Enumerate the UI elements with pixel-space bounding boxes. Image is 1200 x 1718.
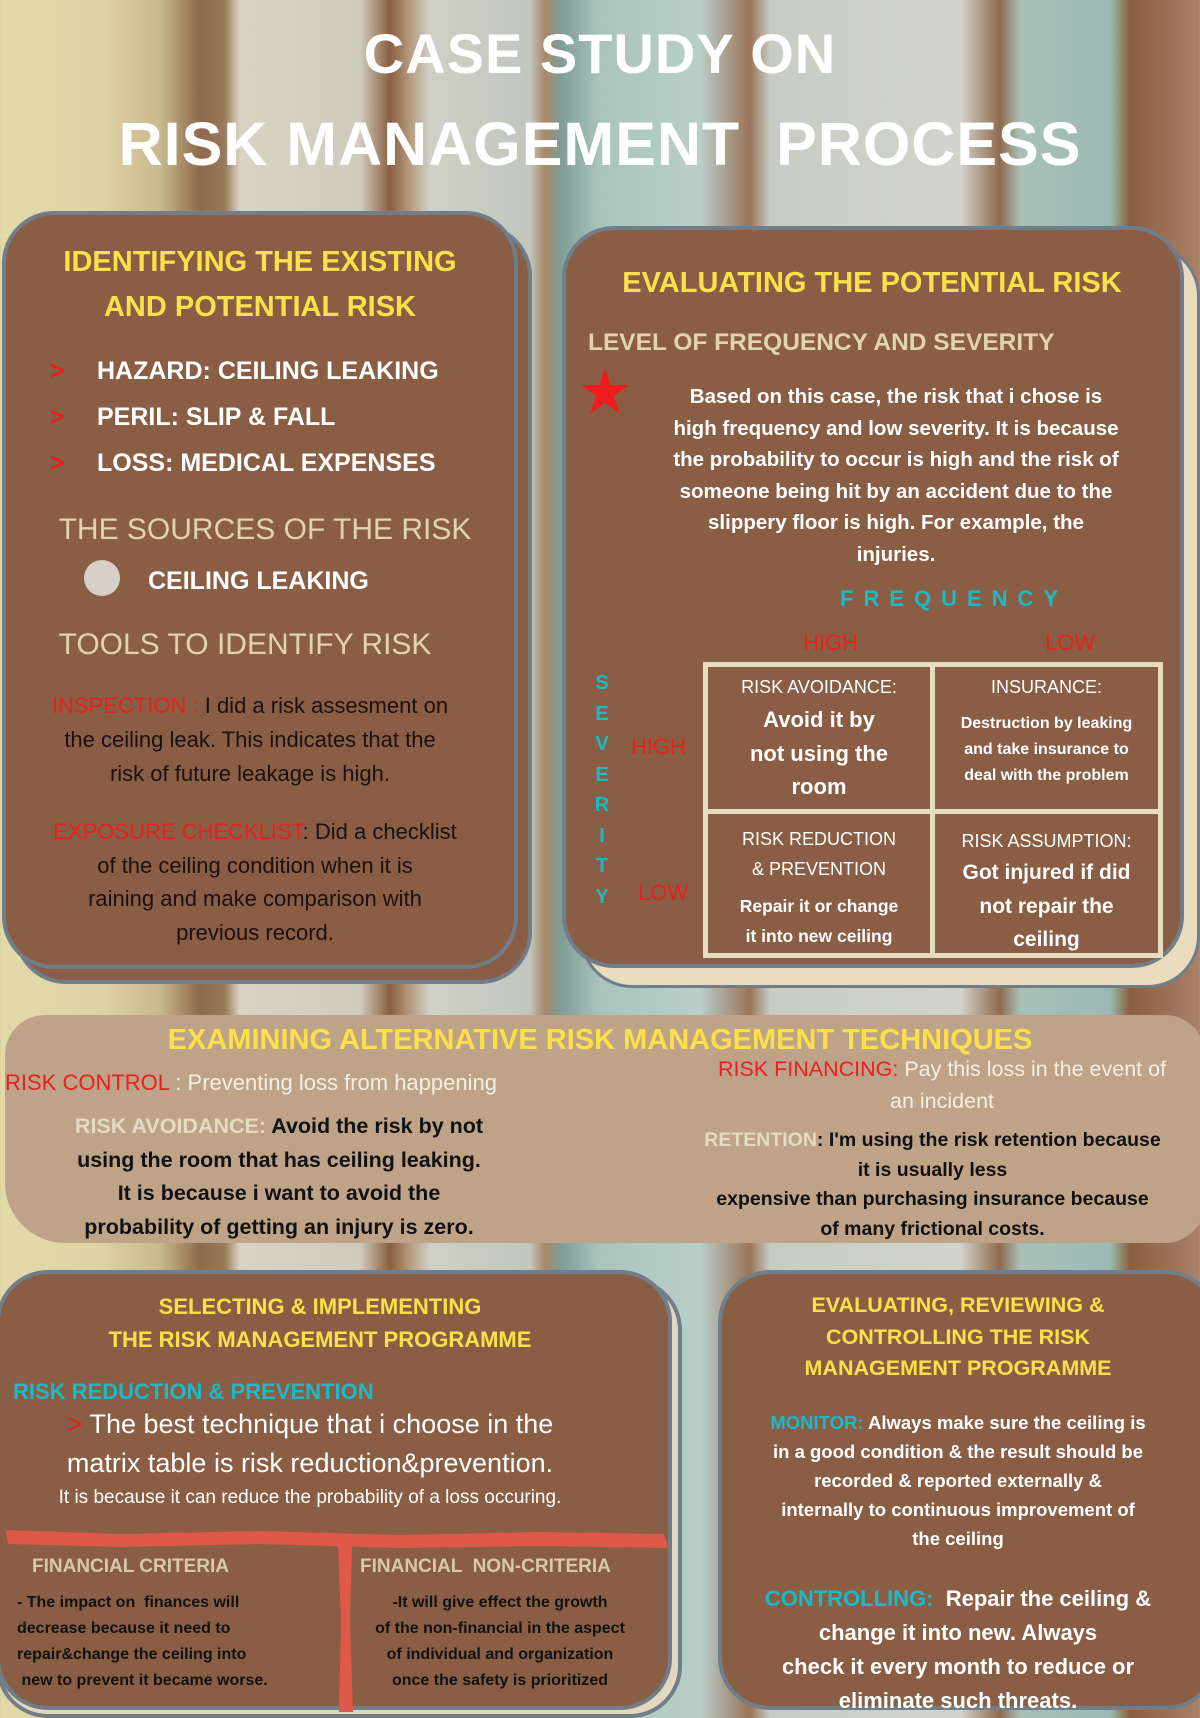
cell: risk avoidance: not using the — [750, 740, 888, 766]
risk control: RISK CONTROL : Preventing loss from happening — [5, 1070, 497, 1095]
severity label: V — [595, 733, 609, 755]
controlling text: change it into new. Always — [819, 1620, 1097, 1645]
panel: evaluating potential risk: LOW — [1045, 630, 1095, 655]
risk avoidance text — [75, 1114, 483, 1238]
non-criteria text: -It will give effect the growth — [392, 1594, 608, 1611]
row labels: HIGH — [631, 734, 686, 759]
sources heading: THE SOURCES OF THE RISK — [59, 513, 471, 546]
explanation text: high frequency and low severity. It is because — [673, 416, 1119, 440]
heading — [805, 1293, 1111, 1380]
exposure checklist text — [53, 819, 457, 944]
exposure checklist text: of the ceiling condition when it is — [97, 852, 413, 878]
cell: risk assumption: not repair the — [979, 894, 1114, 918]
risk financing: RISK FINANCING: Pay this loss in the event of — [718, 1057, 1166, 1081]
explanation text — [673, 385, 1119, 566]
heading: EVALUATING, REVIEWING & — [811, 1293, 1105, 1317]
explanation text: Based on this case, the risk that i chose is — [690, 385, 1102, 408]
cell: insurance: and take insurance to — [964, 741, 1129, 758]
controlling text: CONTROLLING: Repair the ceiling & — [765, 1586, 1151, 1611]
monitor text: recorded & reported externally & — [814, 1470, 1102, 1491]
hazard list: > — [50, 449, 65, 477]
severity label: R — [595, 794, 609, 816]
hazard list: LOSS: MEDICAL EXPENSES — [97, 449, 436, 477]
financial criteria: FINANCIAL CRITERIA — [32, 1556, 229, 1577]
risk avoidance text: It is because i want to avoid the — [118, 1181, 440, 1205]
panel: identifying risk — [2, 211, 532, 984]
monitor text: the ceiling — [912, 1528, 1004, 1549]
exposure checklist text: previous record. — [176, 920, 334, 944]
heading: THE RISK MANAGEMENT PROGRAMME — [109, 1327, 531, 1352]
risk financing — [718, 1057, 1166, 1113]
heading — [63, 246, 457, 323]
heading: SELECTING & IMPLEMENTING — [159, 1294, 481, 1319]
source item: CEILING LEAKING — [148, 567, 369, 595]
heading: EXAMINING ALTERNATIVE RISK MANAGEMENT TECHNIQUES — [168, 1024, 1032, 1056]
technique text: It is because it can reduce the probability of a loss occuring. — [59, 1487, 561, 1508]
cell: insurance — [961, 677, 1132, 784]
tools heading: TOOLS TO IDENTIFY RISK — [59, 628, 431, 661]
controlling text: eliminate such threats. — [839, 1688, 1077, 1713]
financial criteria text: repair&change the ceiling into — [17, 1646, 246, 1663]
heading: EVALUATING THE POTENTIAL RISK — [622, 267, 1122, 299]
inspection text — [52, 693, 448, 786]
non-criteria text — [375, 1594, 625, 1689]
title: RISK MANAGEMENT PROCESS — [119, 110, 1081, 178]
hazard list: HAZARD: CEILING LEAKING — [97, 357, 439, 385]
cell: risk avoidance — [741, 677, 897, 799]
title — [119, 22, 1081, 178]
severity label: T — [596, 855, 608, 877]
non-criteria text: once the safety is prioritized — [392, 1672, 608, 1689]
red brush divider — [6, 1530, 668, 1712]
severity label: S — [595, 672, 609, 694]
panel: evaluating potential risk — [562, 226, 1200, 988]
technique text: matrix table is risk reduction&prevention. — [67, 1448, 553, 1478]
retention text — [704, 1129, 1161, 1240]
technique text — [59, 1409, 561, 1508]
exposure checklist text: raining and make comparison with — [88, 886, 422, 911]
risk avoidance text: probability of getting an injury is zero. — [84, 1214, 474, 1238]
financial non-criteria: FINANCIAL NON-CRITERIA — [360, 1556, 611, 1577]
monitor text: MONITOR: Always make sure the ceiling is — [770, 1412, 1146, 1433]
heading: CONTROLLING THE RISK — [826, 1324, 1090, 1348]
severity label: E — [595, 764, 609, 786]
hazard list: > — [50, 403, 65, 431]
risk avoidance text: using the room that has ceiling leaking. — [77, 1148, 481, 1172]
heading: AND POTENTIAL RISK — [104, 291, 416, 323]
cell: risk reduction: & PREVENTION — [752, 859, 886, 879]
risk matrix — [703, 662, 1163, 958]
cell: risk assumption: ceiling — [1013, 928, 1080, 951]
icon: circle — [84, 560, 120, 596]
hazard list: PERIL: SLIP & FALL — [97, 403, 335, 431]
cell: risk assumption — [961, 831, 1132, 951]
heading: MANAGEMENT PROGRAMME — [805, 1356, 1111, 1380]
cell: risk avoidance: room — [792, 774, 846, 799]
risk avoidance text: RISK AVOIDANCE: Avoid the risk by not — [75, 1114, 483, 1138]
hazard list: > — [50, 357, 65, 385]
retention text: expensive than purchasing insurance because — [716, 1188, 1149, 1210]
financial criteria text: decrease because it need to — [17, 1620, 230, 1637]
severity label: E — [595, 702, 609, 724]
cell: insurance: INSURANCE: — [991, 677, 1102, 697]
cell: risk reduction: RISK REDUCTION — [742, 829, 896, 849]
hazard list — [50, 357, 439, 477]
panel: selecting & implementing — [0, 1270, 682, 1718]
non-criteria text: of the non-financial in the aspect — [375, 1620, 625, 1637]
panel: evaluating potential risk: LOW — [638, 880, 688, 905]
subheading: RISK REDUCTION & PREVENTION — [13, 1379, 374, 1404]
cell: risk avoidance: RISK AVOIDANCE: — [741, 677, 897, 697]
risk financing: an incident — [890, 1089, 994, 1113]
inspection text: the ceiling leak. This indicates that the — [64, 727, 436, 752]
severity label: Y — [595, 886, 609, 908]
monitor text: internally to continuous improvement of — [781, 1499, 1135, 1520]
severity label — [595, 672, 609, 908]
panel: evaluating, reviewing & controlling — [718, 1270, 1200, 1713]
financial criteria text: new to prevent it became worse. — [21, 1672, 268, 1689]
retention text: RETENTION: I'm using the risk retention because — [704, 1129, 1161, 1151]
monitor text: in a good condition & the result should be — [773, 1441, 1143, 1462]
title: CASE STUDY ON — [364, 22, 836, 85]
cell: risk avoidance: Avoid it by — [763, 707, 875, 732]
explanation text: slippery floor is high. For example, the — [708, 511, 1084, 534]
column labels: HIGH — [803, 630, 858, 655]
severity label: I — [599, 824, 605, 846]
financial criteria text: - The impact on finances will — [17, 1594, 239, 1611]
cell: risk reduction: Repair it or change — [740, 896, 898, 916]
frequency label: FREQUENCY — [840, 586, 1068, 611]
cell: risk assumption: RISK ASSUMPTION: — [961, 831, 1132, 851]
cell: risk reduction — [740, 829, 898, 946]
financial criteria text — [17, 1594, 268, 1689]
panel: examining alternative techniques — [5, 1015, 1200, 1243]
technique text: > The best technique that i choose in the — [67, 1409, 553, 1439]
controlling text — [765, 1586, 1151, 1713]
inspection text: risk of future leakage is high. — [110, 761, 390, 786]
inspection text: INSPECTION : I did a risk assesment on — [52, 693, 448, 718]
cell: risk assumption: Got injured if did — [962, 861, 1130, 884]
explanation text: injuries. — [857, 542, 935, 566]
controlling text: check it every month to reduce or — [782, 1654, 1134, 1679]
cell: insurance: deal with the problem — [964, 767, 1129, 784]
non-criteria text: of individual and organization — [387, 1646, 613, 1663]
monitor text — [770, 1412, 1146, 1549]
retention text: it is usually less — [858, 1158, 1007, 1180]
heading: IDENTIFYING THE EXISTING — [63, 246, 457, 278]
cell: risk reduction: it into new ceiling — [746, 926, 892, 946]
exposure checklist text: EXPOSURE CHECKLIST: Did a checklist — [53, 819, 457, 844]
explanation text: someone being hit by an accident due to the — [680, 480, 1112, 502]
retention text: of many frictional costs. — [820, 1218, 1045, 1240]
subheading: LEVEL OF FREQUENCY AND SEVERITY — [588, 329, 1054, 356]
heading — [108, 1294, 531, 1352]
icon: star — [581, 368, 629, 414]
cell: insurance: Destruction by leaking — [961, 715, 1132, 732]
explanation text: the probability to occur is high and the risk of — [673, 448, 1119, 471]
